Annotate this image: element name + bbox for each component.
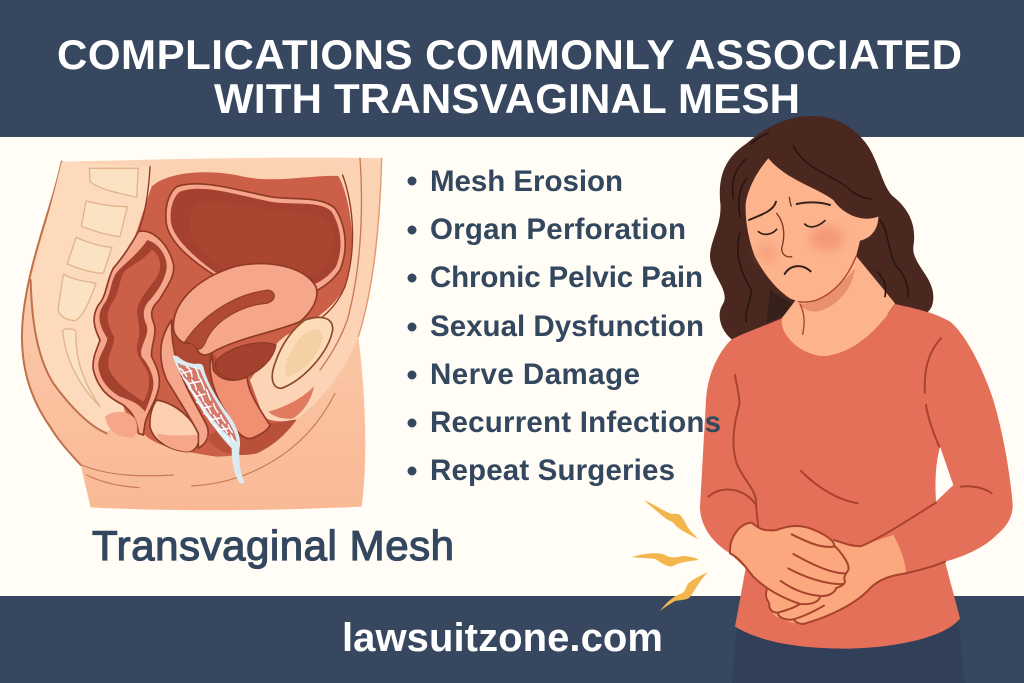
pants: [732, 617, 965, 683]
hair: [710, 116, 933, 339]
nose: [777, 213, 792, 257]
cavity edge lines: [127, 167, 353, 327]
pain sparks: [632, 500, 708, 611]
complications list: [408, 165, 721, 487]
sweater fold lines: [708, 338, 992, 527]
title: WITH TRANSVAGINAL MESH: [214, 75, 800, 122]
title: [57, 31, 962, 122]
lower sleeve edge: [906, 562, 945, 573]
back hand outline: [766, 573, 906, 624]
sweater hem line on arm: [834, 503, 936, 546]
spine vertebrae: [58, 168, 138, 407]
gap between arm and torso: [935, 447, 953, 502]
back light band: [31, 162, 152, 432]
back hand: [766, 533, 906, 624]
complications list: Organ Perforation: [430, 213, 686, 246]
title: COMPLICATIONS COMMONLY ASSOCIATED: [57, 31, 962, 78]
footer website: lawsuitzone.com: [342, 616, 663, 660]
vulva fold: [268, 386, 314, 419]
closed eyes: [758, 221, 825, 234]
hair strands: [732, 133, 908, 322]
lower body: [22, 158, 382, 510]
right body edge: [358, 158, 382, 337]
jaw line: [798, 257, 856, 334]
pubic bone: [272, 317, 333, 388]
cheek blush: [810, 226, 843, 251]
mesh implant: [173, 355, 245, 483]
neck: [782, 257, 895, 356]
pelvic cavity: [107, 172, 353, 457]
complications list: Repeat Surgeries: [430, 454, 675, 487]
right band line: [320, 158, 361, 370]
finger lines: [781, 534, 845, 596]
uterus: [173, 264, 317, 355]
mouth: [785, 266, 811, 274]
outer body contour: [22, 162, 81, 465]
hair shadow: [767, 290, 800, 323]
blob shade: [157, 433, 197, 452]
right tissue band: [250, 158, 382, 421]
cavity floor: [207, 419, 297, 455]
complications list: Sexual Dysfunction: [430, 310, 704, 343]
left cheek blush: [757, 244, 776, 263]
face: [746, 158, 878, 302]
complications list: Mesh Erosion: [430, 165, 623, 198]
complications list: Chronic Pelvic Pain: [430, 261, 703, 294]
lower dark organ: [215, 343, 276, 380]
header band: [0, 0, 1024, 137]
bladder: [166, 184, 345, 293]
buttock tissue: [105, 412, 137, 438]
anatomy caption: Transvaginal Mesh: [92, 522, 454, 569]
sweater: [700, 304, 1013, 649]
complications list: Nerve Damage: [430, 358, 640, 391]
footer band: [0, 596, 1024, 683]
neck shadow: [800, 268, 855, 312]
abdomen crease lines: [82, 393, 335, 488]
woman illustration: [700, 116, 1013, 683]
eyebrows: [749, 197, 830, 220]
lower tissue blob: [150, 400, 199, 452]
list bullets: [408, 176, 416, 476]
front hand: [730, 523, 849, 604]
vagina tissue: [210, 355, 270, 439]
complications list: Recurrent Infections: [430, 406, 721, 439]
rectum: [93, 231, 174, 435]
vaginal wall band: [161, 320, 208, 448]
back band line: [31, 280, 107, 433]
vaginal canal dark: [172, 322, 243, 445]
anatomy illustration: [22, 158, 382, 510]
